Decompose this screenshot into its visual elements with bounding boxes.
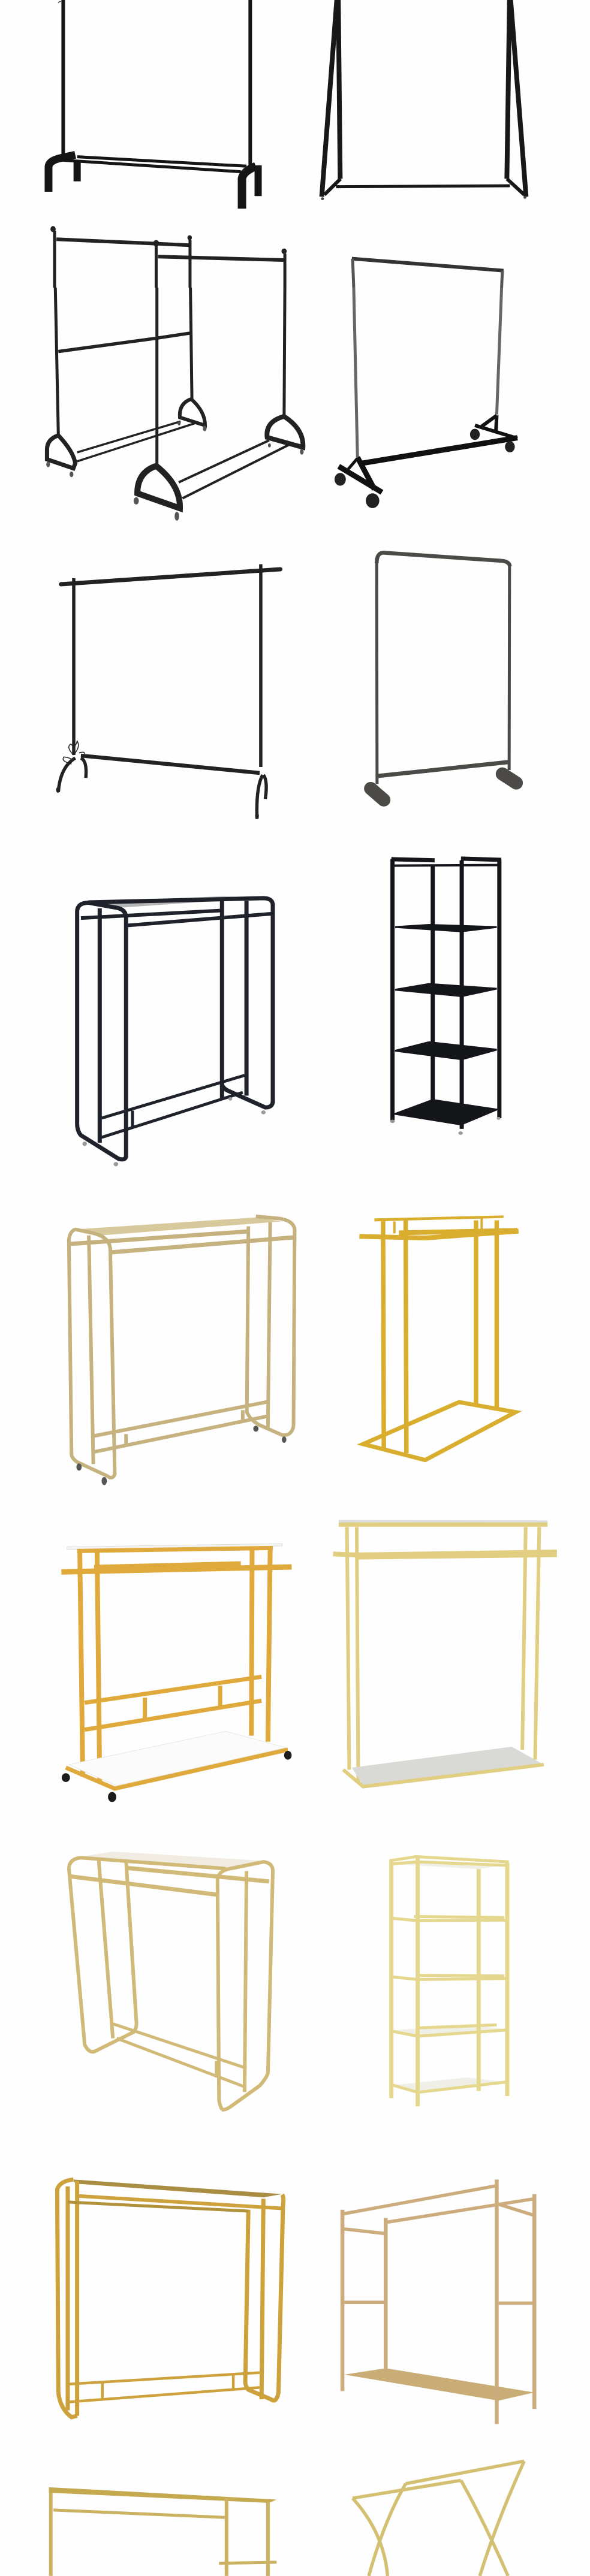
rack 16: tan rack with shelf <box>342 2179 534 2424</box>
rack 3: pair of black racks with arched feet <box>46 226 303 521</box>
rack 5: black rack with scrolled feet <box>56 564 281 819</box>
rack 13: light gold looped rack with marble top <box>69 1852 273 2110</box>
rack 9 perforated top shelf <box>76 1218 282 1236</box>
rack 1: black bench base rack <box>49 0 258 209</box>
rack 13 marble top shelf <box>81 1852 263 1868</box>
rack 11 white base shelf <box>69 1731 286 1786</box>
rack 8: black tower shelf <box>390 859 501 1135</box>
rack 2: black A-frame rack <box>321 0 526 200</box>
rack 18: gold crossed X-frame rack <box>353 2461 524 2576</box>
rack 15: amber gold looped rack <box>57 2179 284 2417</box>
rack 16 base shelf <box>344 2368 534 2400</box>
rack 7: navy double-loop rack <box>77 896 273 1166</box>
rack 12: pale gold rack with marble shelves <box>333 1520 557 1787</box>
lower posts, arches and wheels <box>46 288 303 521</box>
upper rails and finials <box>50 226 287 288</box>
rack 6: dark grey rack with pod feet <box>371 552 516 800</box>
rack 4: Z-base rolling rack <box>335 259 517 508</box>
rack 14: pale gold tower shelf <box>390 1857 509 2106</box>
rack 11: gold rack with white shelves on black casters <box>61 1544 291 1802</box>
rack 17 perforated top shelf <box>49 2487 276 2503</box>
rack 10: bright gold rack with rectangular base <box>359 1215 519 1460</box>
rack 12 marble top plank <box>339 1520 547 1523</box>
rack 9: champagne double-loop rack on wheels <box>69 1216 294 1485</box>
rack 11 white top plank <box>67 1544 282 1550</box>
rack 17: gold rack with perforated top <box>49 2487 276 2576</box>
rack 15 perforated top shelf <box>73 2179 282 2197</box>
rack 12 marble base shelf <box>352 1747 542 1786</box>
rack 7 top shelf <box>88 896 263 907</box>
